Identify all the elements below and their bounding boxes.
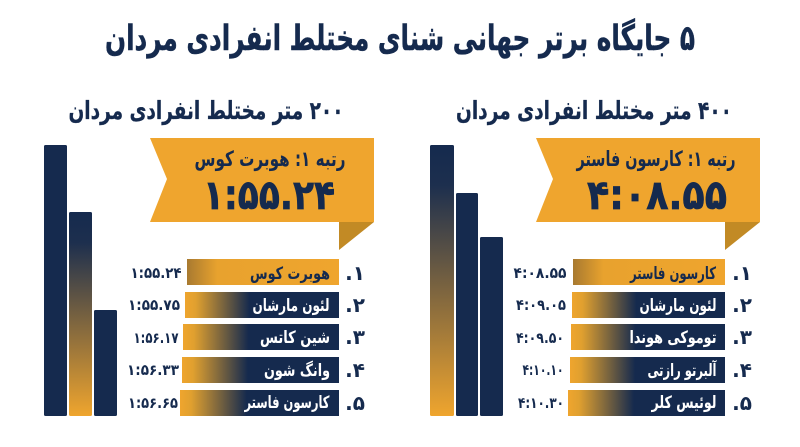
- ranking row 3: [516, 324, 752, 350]
- ranking row 1: هوبرت کوس: [250, 264, 330, 284]
- ribbon: 200m winner: ۱:۵۵.۲۴: [203, 171, 335, 219]
- ranking row 5: ۱:۵۶.۶۵: [128, 394, 178, 412]
- heading: 200m: ۲۰۰ متر مختلط انفرادی مردان: [68, 96, 344, 126]
- ranking row 1: ۴:۰۸.۵۵: [514, 264, 566, 282]
- ranking row 2: [516, 292, 752, 318]
- bar chart: 200m: [44, 145, 117, 416]
- ranking row 2: ۲.: [345, 293, 365, 317]
- ranking row 5: ۴:۱۰.۳۰: [518, 394, 564, 412]
- ranking row 3: توموکی هوندا: [630, 328, 716, 348]
- ranking row 4: ۱:۵۶.۳۳: [127, 361, 179, 379]
- ranking row 1: ۱.: [732, 261, 752, 285]
- ranking row 1: ۱:۵۵.۲۴: [130, 264, 182, 282]
- ranking row 2: ۲.: [732, 293, 752, 317]
- panel: 400m individual medley: [430, 96, 760, 416]
- ranking row 4: وانگ شون: [264, 360, 330, 381]
- ribbon: 200m winner: رتبه ۱: هوبرت کوس: [194, 147, 346, 171]
- ranking row 1: [514, 259, 752, 285]
- ranking row 2: لئون مارشان: [252, 296, 330, 316]
- panel: 200m individual medley: [44, 96, 374, 416]
- ribbon: 400m winner: رتبه ۱: کارسون فاستر: [576, 147, 736, 171]
- ranking row 3: [134, 324, 365, 350]
- ranking row 4: ۴.: [732, 358, 752, 382]
- ranking row 1: ۱.: [345, 261, 365, 285]
- ranking row 2: ۱:۵۵.۷۵: [128, 296, 180, 314]
- ranking row 3: ۳.: [732, 325, 752, 349]
- ranking row 3: شین کاتس: [260, 328, 330, 348]
- ranking row 3: ۱:۵۶.۱۷: [134, 329, 178, 347]
- ranking row 1: [130, 259, 365, 285]
- ranking row 5: ۵.: [345, 391, 365, 415]
- ranking row 4: آلبرتو رازتی: [648, 359, 717, 381]
- ranking row 4: [522, 357, 752, 383]
- ranking row 2: لئون مارشان: [640, 296, 716, 316]
- ribbon: 400m winner: ۴:۰۸.۵۵: [587, 171, 727, 219]
- heading: 400m: ۴۰۰ متر مختلط انفرادی مردان: [456, 96, 732, 126]
- ranking row 4: [127, 357, 365, 383]
- ranking row 5: لوئیس کلر: [651, 393, 716, 413]
- ranking row 5: [518, 390, 752, 416]
- ribbon: 200m winner: [150, 138, 374, 250]
- ranking row 2: ۴:۰۹.۰۵: [516, 296, 566, 314]
- ranking row 5: [128, 390, 365, 416]
- ranking row 5: ۵.: [732, 391, 752, 415]
- ranking row 3: ۴:۰۹.۵۰: [516, 329, 564, 347]
- ribbon: 400m winner: [536, 138, 760, 250]
- ranking row 3: ۳.: [345, 325, 365, 349]
- ranking row 1: کارسون فاستر: [629, 264, 716, 284]
- ranking row 5: کارسون فاستر: [244, 393, 330, 413]
- ranking row 4: ۴.: [345, 358, 365, 382]
- ranking row 4: ۴:۱۰.۱۰: [522, 361, 564, 379]
- bar chart: 400m: [430, 145, 503, 416]
- ranking row 2: [128, 292, 365, 318]
